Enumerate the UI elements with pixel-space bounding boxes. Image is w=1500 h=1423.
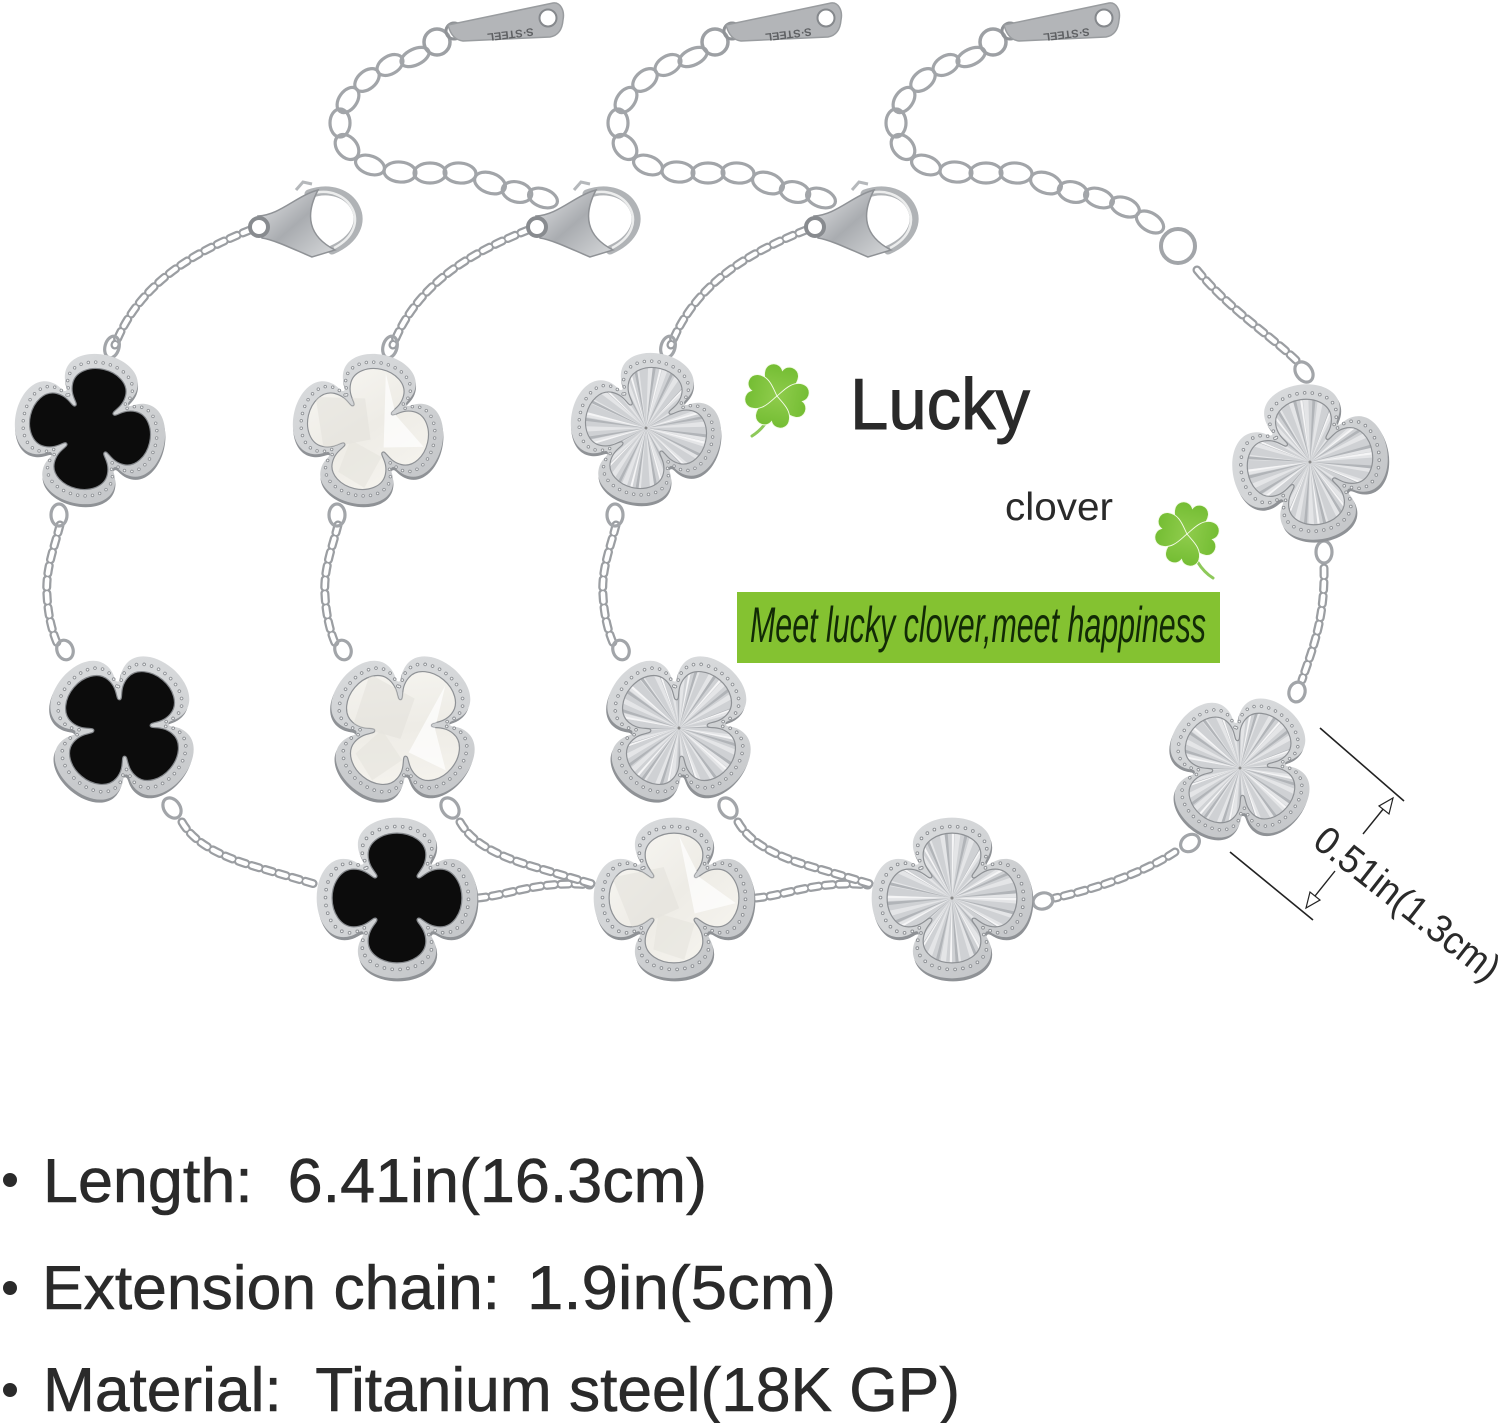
text: clover: clover xyxy=(1005,486,1113,529)
chain: silver bracelet xyxy=(603,230,874,885)
spec: length: Length: 6.41in(16.3cm) xyxy=(43,1147,707,1216)
chain right side: silver bracelet xyxy=(1031,193,1332,911)
clover: pearl bottom xyxy=(594,818,755,981)
spec list xyxy=(3,1147,960,1423)
banner: slogan: Meet lucky clover,meet happiness xyxy=(750,597,1206,653)
lobster clasp: black bracelet xyxy=(250,182,358,257)
spec: extension chain: 1.9in(5cm) xyxy=(527,1254,836,1323)
extension chain: pearl bracelet xyxy=(608,3,841,212)
banner: slogan xyxy=(737,592,1220,663)
lobster clasp: silver bracelet xyxy=(806,182,914,257)
clover: black bottom xyxy=(317,818,478,981)
bracelet: black clover xyxy=(0,3,590,981)
clover: silver top left xyxy=(555,337,738,522)
clover: black top xyxy=(0,338,182,523)
clover: silver bottom xyxy=(872,818,1033,981)
dimension marker: clover width xyxy=(1230,728,1500,990)
bracelet: silver clover xyxy=(555,3,1401,981)
heading: Lucky: Lucky xyxy=(850,365,1030,445)
lobster clasp: pearl bracelet xyxy=(528,182,636,257)
chain to next bracelet: black xyxy=(478,884,590,898)
spec: material: Material: Titanium steel(18K GP) xyxy=(43,1356,960,1423)
icon: four-leaf clover beside Lucky xyxy=(743,362,811,436)
spec: extension chain: Extension chain: xyxy=(42,1254,500,1323)
extension chain: silver bracelet xyxy=(886,3,1119,212)
clover: pearl middle xyxy=(291,618,514,841)
icon: four-leaf clover beside clover text xyxy=(1153,500,1221,578)
extension chain: black bracelet xyxy=(330,3,563,212)
chain: black bracelet xyxy=(47,230,318,885)
clover: silver right lower xyxy=(1132,661,1347,877)
clover: silver right upper xyxy=(1221,373,1401,554)
clover: silver middle left xyxy=(567,618,790,841)
spec: extension chain xyxy=(3,1254,836,1323)
clover: black middle xyxy=(10,618,233,841)
clover: pearl top xyxy=(277,338,460,523)
chain: pearl bracelet xyxy=(325,230,596,885)
chain to next bracelet: pearl xyxy=(756,884,868,898)
bracelet: mother-of-pearl clover xyxy=(277,3,868,981)
